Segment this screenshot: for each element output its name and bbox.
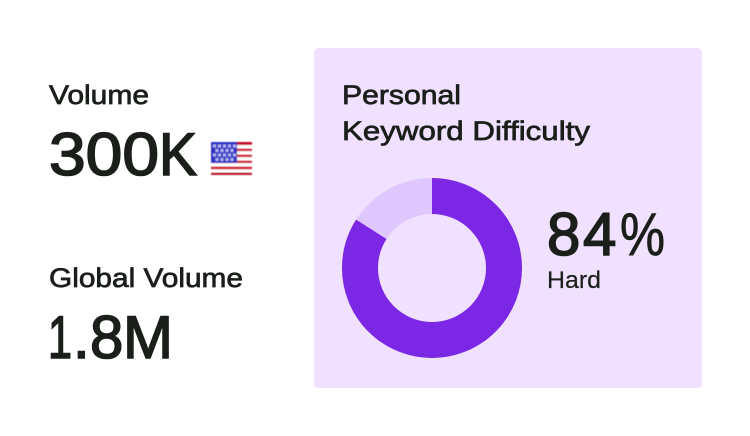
stat: 300K: 300 xyxy=(49,121,159,188)
stat: 84%: 8 xyxy=(547,201,580,268)
stat: 1.8M: M xyxy=(123,304,173,371)
stat: 84%: 4 xyxy=(583,201,616,268)
stat: 1.8M: . xyxy=(73,304,90,371)
icon: US flag xyxy=(211,142,252,175)
stat: 1.8M xyxy=(48,304,173,371)
panel: personal keyword difficulty xyxy=(314,48,702,388)
heading xyxy=(342,80,591,146)
label: Global Volume: Global Volume xyxy=(49,263,243,293)
stat: 84%: % xyxy=(620,201,665,268)
stat: 300K: K xyxy=(159,121,197,188)
heading: Keyword Difficulty xyxy=(342,116,591,146)
donut chart: 84% xyxy=(360,196,504,340)
stat: 84% xyxy=(547,201,665,268)
stat: 300K xyxy=(49,121,197,188)
heading: Personal xyxy=(342,80,461,110)
stat: 1.8M: 8 xyxy=(90,304,123,371)
label: Volume: Volume xyxy=(49,80,149,110)
stat: 1.8M: 1 xyxy=(48,304,72,371)
label: Hard: Hard xyxy=(547,267,601,294)
